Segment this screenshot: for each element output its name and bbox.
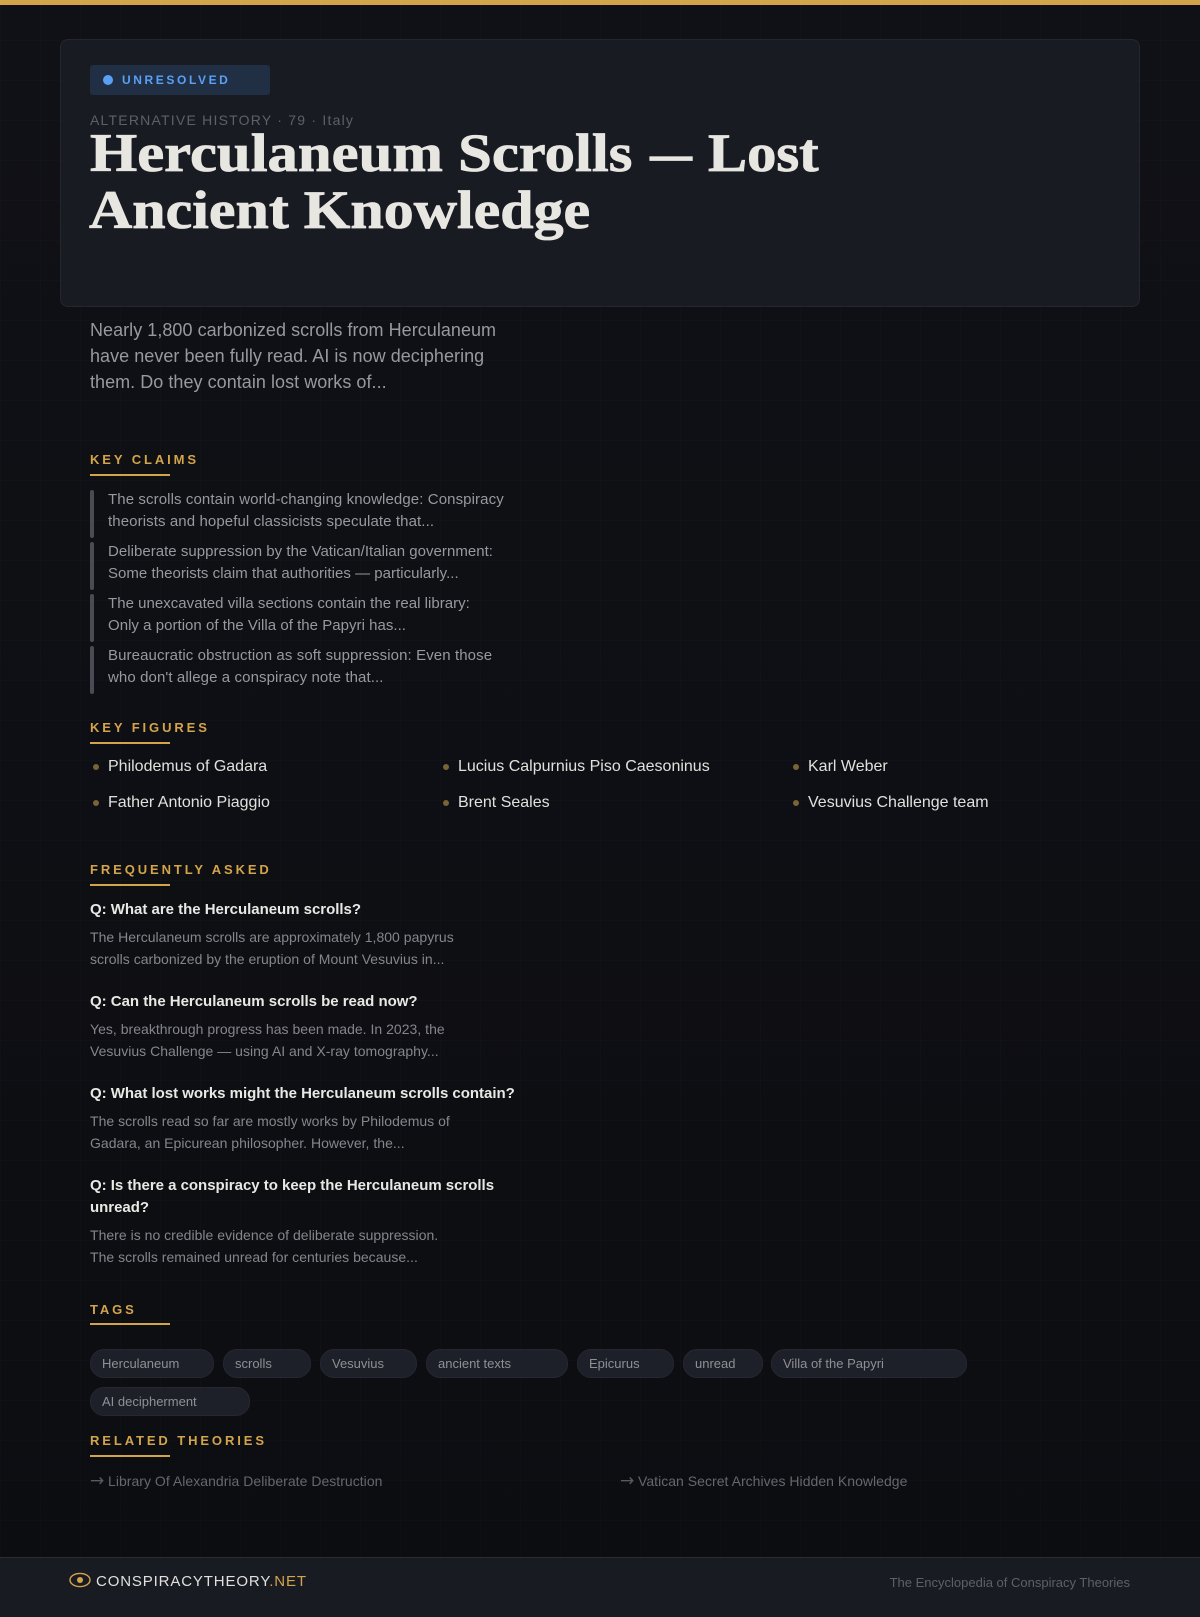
FAQ 4: There is no credible evidence of deliberate suppression.: [90, 1227, 438, 1243]
FAQ 2: [90, 993, 445, 1059]
tag: scrolls: [235, 1356, 272, 1371]
related link 2: →: [620, 1471, 634, 1491]
tag: unread: [695, 1356, 735, 1371]
panel: key claims: [90, 490, 504, 694]
summary text: [90, 320, 496, 392]
claim 3: The unexcavated villa sections contain the real library:: [108, 595, 470, 612]
FAQ 2: Vesuvius Challenge — using AI and X-ray tomography...: [90, 1043, 439, 1059]
FAQ 3: [90, 1085, 515, 1151]
figure: Karl Weber: Karl Weber: [808, 758, 888, 775]
tag: Vesuvius: [332, 1356, 384, 1371]
tag: AI decipherment: [102, 1394, 197, 1409]
heading: frequently asked: FREQUENTLY ASKED: [90, 862, 272, 877]
figure: Lucius Calpurnius Piso Caesoninus: Lucius Calpurnius Piso Caesoninus: [458, 758, 710, 775]
panel: key figures: [93, 758, 989, 811]
heading: related theories: RELATED THEORIES: [90, 1433, 267, 1448]
footer tagline: The Encyclopedia of Conspiracy Theories: [890, 1575, 1130, 1590]
claim 4: [90, 646, 492, 694]
panel: tags: [90, 1349, 967, 1416]
summary text: them. Do they contain lost works of...: [90, 372, 387, 392]
tag: [426, 1349, 568, 1378]
figure: Brent Seales: Brent Seales: [458, 794, 550, 811]
claim 2: [90, 542, 493, 590]
claim 1: [90, 490, 504, 538]
tag: [683, 1349, 763, 1378]
tag: [577, 1349, 674, 1378]
tag: [320, 1349, 417, 1378]
figure: Vesuvius Challenge team: Vesuvius Challenge team: [808, 794, 989, 811]
tag: [90, 1387, 250, 1416]
top accent bar: [0, 0, 1200, 5]
claim 4: Bureaucratic obstruction as soft suppression: Even those: [108, 647, 492, 664]
FAQ 3: The scrolls read so far are mostly works by Philodemus of: [90, 1113, 450, 1129]
related link 1: Library Of Alexandria Deliberate Destruction: [108, 1473, 382, 1489]
category line: ALTERNATIVE HISTORY · 79 · Italy: [90, 112, 354, 128]
related link 2: Vatican Secret Archives Hidden Knowledge: [638, 1473, 907, 1489]
tag: [223, 1349, 311, 1378]
FAQ 4: The scrolls remained unread for centuries because...: [90, 1249, 418, 1265]
tag: Epicurus: [589, 1356, 640, 1371]
badge label: UNRESOLVED: [122, 73, 230, 87]
FAQ 4: Q: Is there a conspiracy to keep the Herculaneum scrolls: [90, 1177, 494, 1194]
FAQ 1: Q: What are the Herculaneum scrolls?: [90, 901, 361, 918]
title: —: [650, 123, 692, 183]
title: Lost: [708, 123, 819, 183]
FAQ 4: unread?: [90, 1199, 149, 1216]
icon: status dot: [103, 75, 113, 85]
heading: key figures: KEY FIGURES: [90, 720, 210, 735]
claim 3: Only a portion of the Villa of the Papyri has...: [108, 617, 406, 634]
FAQ 4: [90, 1177, 494, 1265]
FAQ 3: Gadara, an Epicurean philosopher. However, the...: [90, 1135, 405, 1151]
title: Herculaneum Scrolls: [90, 123, 632, 183]
summary text: have never been fully read. AI is now deciphering: [90, 346, 484, 366]
claim 3: [90, 594, 470, 642]
heading: tags: TAGS: [90, 1302, 137, 1317]
brand logo text: CONSPIRACYTHEORY.NET: [96, 1573, 307, 1590]
FAQ 2: Yes, breakthrough progress has been made. In 2023, the: [90, 1021, 445, 1037]
figure: Philodemus of Gadara: Philodemus of Gadara: [108, 758, 267, 775]
claim 1: theorists and hopeful classicists speculate that...: [108, 513, 434, 530]
FAQ 1: [90, 901, 454, 967]
tag: Villa of the Papyri: [783, 1356, 884, 1371]
claim 2: Some theorists claim that authorities — particularly...: [108, 565, 459, 582]
figure: Father Antonio Piaggio: Father Antonio Piaggio: [108, 794, 270, 811]
panel: header card: [60, 39, 1140, 307]
claim 1: The scrolls contain world-changing knowledge: Conspiracy: [108, 491, 504, 508]
related link 1: →: [90, 1471, 104, 1491]
summary text: Nearly 1,800 carbonized scrolls from Herculaneum: [90, 320, 496, 340]
title: [89, 123, 819, 240]
FAQ 3: Q: What lost works might the Herculaneum scrolls contain?: [90, 1085, 515, 1102]
tag: [771, 1349, 967, 1378]
icon: eye: [69, 1572, 91, 1588]
heading: key claims: KEY CLAIMS: [90, 452, 199, 467]
tag: Herculaneum: [102, 1356, 179, 1371]
FAQ 2: Q: Can the Herculaneum scrolls be read now?: [90, 993, 418, 1010]
tag: ancient texts: [438, 1356, 511, 1371]
tag: [90, 1349, 214, 1378]
status badge: [90, 65, 270, 95]
FAQ 1: The Herculaneum scrolls are approximately 1,800 papyrus: [90, 929, 454, 945]
panel: footer: [0, 1557, 1200, 1617]
claim 4: who don't allege a conspiracy note that...: [108, 669, 384, 686]
claim 2: Deliberate suppression by the Vatican/Italian government:: [108, 543, 493, 560]
title: Ancient Knowledge: [89, 180, 590, 240]
FAQ 1: scrolls carbonized by the eruption of Mount Vesuvius in...: [90, 951, 444, 967]
